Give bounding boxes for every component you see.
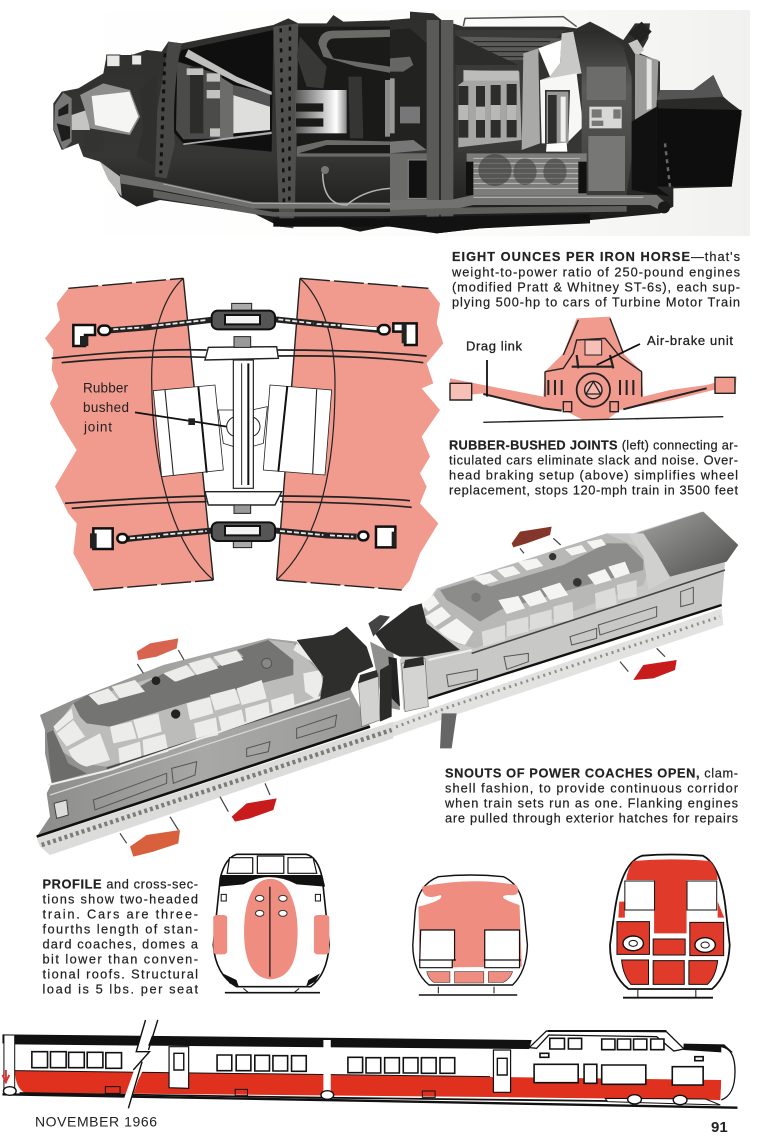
right power coach: [350, 512, 738, 752]
profile drawing of train: [2, 1020, 737, 1108]
leader lines: [487, 344, 640, 397]
caption: rubber-bushed joints: head braking setup (above) simplifies wheel: [449, 468, 738, 482]
caption: snouts of power coaches: [444, 766, 739, 826]
caption: eight ounces: weight-to-power ratio of 250-pound engines: [451, 264, 740, 280]
track bed: [37, 722, 393, 855]
leader arrow: [135, 412, 227, 427]
caption: profile: PROFILE and cross-sec-: [42, 876, 198, 892]
seats: [420, 930, 520, 968]
caption: profile: [42, 876, 199, 996]
windows: [32, 1038, 703, 1085]
caption: eight ounces: [451, 249, 740, 310]
engine front half: [53, 15, 402, 232]
engine bays: [617, 922, 724, 984]
caption: rubber-bushed joints: replacement, stops 120-mph train in 3500 feet: [449, 482, 738, 498]
left power coach: [37, 627, 393, 857]
seats: [625, 881, 717, 910]
caption: profile: load is 5 lbs. per seat: [42, 982, 198, 996]
diagram: engine cross-section: [610, 854, 730, 998]
caption: eight ounces: EIGHT OUNCES PER IRON HORSE—that's: [452, 249, 740, 264]
caption: rubber-bushed joints: ticulated cars eliminate slack and noise. Over-: [449, 452, 738, 468]
doors: [169, 1047, 511, 1092]
white seat blocks: [153, 385, 332, 477]
caption: eight ounces: (modified Pratt & Whitney ST-6s), each sup-: [452, 280, 740, 294]
pink door: [243, 878, 298, 980]
label: rubber bushed joint: bushed: [83, 400, 129, 415]
bottom tie rods: [123, 531, 357, 539]
left snout: [297, 627, 373, 700]
footer: date: NOVEMBER 1966: [35, 1114, 157, 1130]
right pink car end: [277, 278, 443, 590]
black roof: [2, 1034, 733, 1052]
caption: profile: dard coaches, domes a: [42, 936, 199, 952]
engine rear half: [390, 12, 742, 233]
nose: [721, 1047, 735, 1100]
track bed: [350, 608, 723, 752]
break mark: [121, 1020, 158, 1108]
caption: snouts of power coaches: SNOUTS OF POWER COACHES OPEN, clam-: [445, 766, 738, 780]
caption: profile: bit lower than conven-: [42, 952, 198, 966]
left pink car end: [45, 278, 213, 590]
label: rubber bushed joint: joint: [83, 420, 112, 434]
caption: profile: train. Cars are three-: [42, 906, 198, 922]
caption: snouts of power coaches: shell fashion, to provide continuous corridor: [445, 780, 739, 796]
red lower body: [15, 1071, 721, 1100]
diagram: passenger cross-section: [413, 875, 527, 995]
caption: profile: tional roofs. Structural: [42, 966, 198, 982]
centre column: [218, 407, 267, 447]
caption: eight ounces: plying 500-hp to cars of Turbine Motor Train: [452, 294, 740, 310]
caption: rubber-bushed joints: [449, 438, 738, 498]
diagram: front view of coach: [213, 854, 329, 993]
footer: page number: 91: [711, 1119, 728, 1136]
caption: snouts of power coaches: when train sets run as one. Flanking engines: [444, 796, 738, 810]
engine pods: [512, 527, 552, 547]
label: air-brake unit: Air-brake unit: [647, 333, 733, 348]
illustration: articulated train: [37, 512, 738, 857]
wheels: [605, 1098, 720, 1105]
engine pods: [137, 638, 178, 660]
label: rubber bushed joint: [83, 380, 129, 434]
caption: profile: fourths length of stan-: [42, 922, 198, 936]
label: rubber bushed joint: Rubber: [83, 380, 128, 396]
diagram: air-brake unit: [450, 317, 737, 422]
dome: [529, 1031, 684, 1051]
photo: turbine engine: [50, 10, 750, 236]
track: [2, 1094, 737, 1108]
diagram: rubber-bushed coupling: [45, 278, 443, 590]
caption: snouts of power coaches: are pulled through exterior hatches for repairs: [445, 810, 738, 826]
black brow band: [219, 875, 325, 887]
caption: profile: tions show two-headed: [42, 892, 198, 906]
caption: rubber-bushed joints: RUBBER-BUSHED JOINTS (left) connecting ar-: [449, 438, 738, 452]
top tie rods: [107, 319, 380, 331]
right snout: [375, 603, 460, 657]
label: drag link: Drag link: [466, 338, 522, 354]
